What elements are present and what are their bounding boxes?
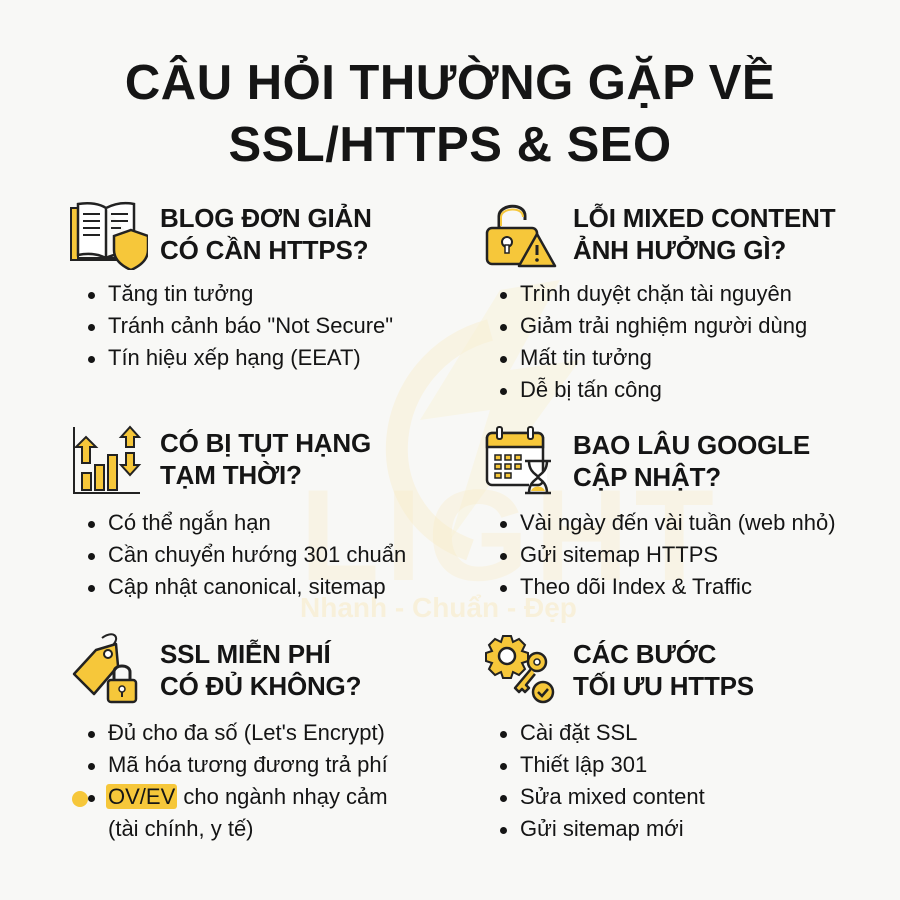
heading: CÁC BƯỚC [573, 639, 716, 669]
panel: mixed content [486, 203, 836, 402]
bullets [88, 720, 388, 841]
watermark logo: Nhanh - Chuẩn - Đẹp [300, 592, 577, 623]
panel: ranking drop [73, 426, 406, 599]
title [125, 55, 775, 172]
bullets: Cài đặt SSL [520, 720, 637, 745]
bullets: Mất tin tưởng [520, 345, 652, 370]
heading [573, 639, 754, 701]
title: CÂU HỎI THƯỜNG GẶP VỀ [125, 56, 775, 110]
title: SSL/HTTPS & SEO [228, 118, 672, 172]
heading [573, 430, 810, 492]
icon: book shield [70, 202, 148, 270]
icon: tag lock [72, 633, 138, 704]
bullets: Gửi sitemap HTTPS [520, 542, 718, 567]
bullets: Tín hiệu xếp hạng (EEAT) [108, 345, 361, 370]
heading: CẬP NHẬT? [573, 462, 721, 492]
bullets: OV/EV cho ngành nhạy cảm [108, 784, 388, 809]
heading [160, 428, 371, 490]
bullets: Vài ngày đến vài tuần (web nhỏ) [520, 510, 836, 535]
bullets: Trình duyệt chặn tài nguyên [520, 281, 792, 306]
heading: CÓ BỊ TỤT HẠNG [160, 428, 371, 458]
panel: steps [485, 635, 754, 841]
panel: free ssl [72, 633, 388, 841]
watermark logo: LIGHT [300, 462, 720, 608]
bullets [500, 720, 705, 841]
heading [160, 203, 372, 265]
bullets: Cập nhật canonical, sitemap [108, 574, 386, 599]
bullets [500, 281, 807, 402]
heading: SSL MIỄN PHÍ [160, 639, 330, 669]
icon: open lock warning [486, 204, 556, 268]
bullets: Theo dõi Index & Traffic [520, 574, 752, 599]
highlight dot [72, 791, 88, 807]
bullets [500, 510, 836, 599]
bullets: Tránh cảnh báo "Not Secure" [108, 313, 393, 338]
icon: calendar hourglass [486, 426, 551, 494]
bullets: Dễ bị tấn công [520, 377, 662, 402]
bullets: (tài chính, y tế) [108, 816, 254, 841]
panel: blog https [70, 202, 393, 370]
icon: gear key check [485, 635, 554, 704]
heading: CÓ CẦN HTTPS? [160, 235, 368, 265]
bullets: Đủ cho đa số (Let's Encrypt) [108, 720, 385, 745]
bullets: Gửi sitemap mới [520, 816, 684, 841]
panel: google update [486, 426, 836, 599]
heading: ẢNH HƯỞNG GÌ? [573, 235, 786, 265]
bullets: Có thể ngắn hạn [108, 510, 271, 535]
heading [160, 639, 361, 701]
bullets: Thiết lập 301 [520, 752, 647, 777]
bullets: Mã hóa tương đương trả phí [108, 752, 388, 777]
heading: BLOG ĐƠN GIẢN [160, 203, 372, 233]
icon: chart arrows [73, 426, 142, 494]
heading: TẠM THỜI? [160, 460, 302, 490]
heading: BAO LÂU GOOGLE [573, 430, 810, 460]
bullets [88, 281, 393, 370]
heading: LỖI MIXED CONTENT [573, 203, 835, 233]
watermark logo [300, 280, 720, 623]
bullets: Giảm trải nghiệm người dùng [520, 313, 807, 338]
bullets: Tăng tin tưởng [108, 281, 253, 306]
bullets: Sửa mixed content [520, 784, 705, 809]
heading: CÓ ĐỦ KHÔNG? [160, 671, 361, 701]
heading: TỐI ƯU HTTPS [573, 671, 754, 701]
bullets: Cần chuyển hướng 301 chuẩn [108, 542, 406, 567]
bullets [88, 510, 406, 599]
heading [573, 203, 836, 265]
